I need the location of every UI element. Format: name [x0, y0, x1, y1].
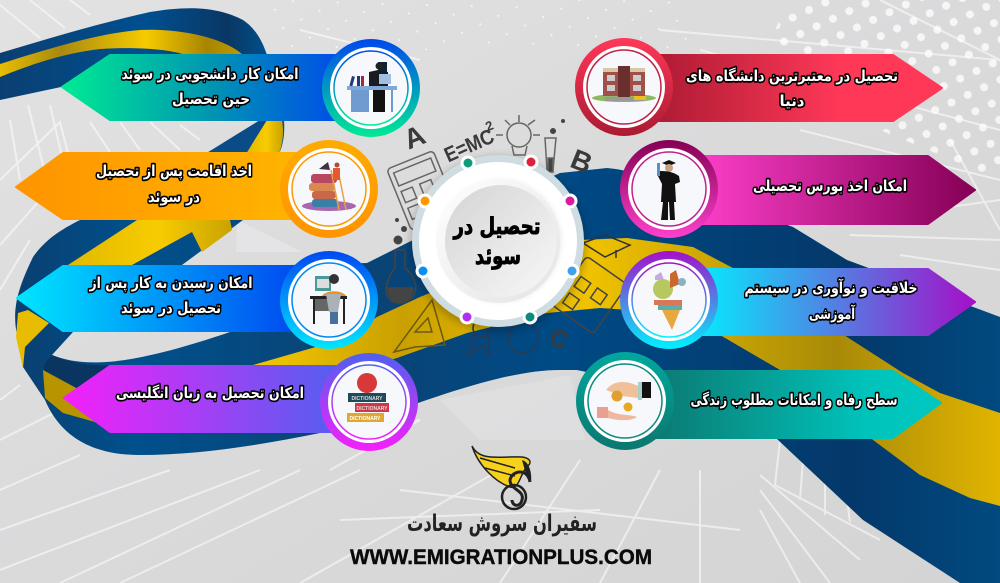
text: left 4: امکان تحصیل به زبان انگلیسی: [116, 384, 304, 402]
ribbon: top arc: [0, 8, 267, 100]
circle: left 3: [280, 251, 378, 349]
text: left 1: [122, 65, 298, 108]
circle: left 1: [322, 39, 420, 137]
doodle letters: [399, 118, 597, 355]
circle: right 1: [575, 38, 673, 136]
ribbon: gold under orange arrow: [68, 220, 232, 265]
circle: right 3: [620, 251, 718, 349]
icon: set square: [394, 300, 445, 352]
icon: apple: [508, 323, 538, 353]
icon: office worker: [347, 62, 397, 112]
hub dots: [417, 156, 578, 323]
circle: right 4: [576, 352, 674, 450]
text: left 3: تحصیل در سوئد: [121, 299, 221, 317]
website url: WWW.EMIGRATIONPLUS.COM: [350, 546, 652, 569]
ribbon: main gold band: [253, 238, 1000, 506]
icon: test tube: [545, 138, 556, 172]
icon: wing and swan: [472, 446, 531, 509]
icon: dictionaries and apple: DICTIONARY: [357, 406, 388, 412]
logo: [350, 446, 652, 569]
text: right 2: امکان اخذ بورس تحصیلی: [753, 177, 907, 195]
text: left 2: [96, 162, 252, 206]
icon: university building: [592, 66, 656, 102]
doodle letters: B: [566, 143, 597, 179]
arrow: right 3: [690, 269, 975, 335]
ribbon: gold lower loop: [43, 370, 95, 422]
text: left 2: در سوئد: [148, 188, 200, 206]
center hub: [410, 155, 586, 332]
arrow: right 4: [650, 371, 941, 438]
icon: calculator right: [552, 256, 628, 334]
text: right 3: خلاقیت و نوآوری در سیستم: [744, 279, 918, 297]
ribbon: loop shadow: [43, 355, 110, 392]
icon: books and ladder: [302, 162, 356, 211]
icon: calculator left: [387, 151, 458, 231]
doodle letters: 2: [483, 118, 495, 134]
hub title: تحصیل در: [453, 214, 540, 240]
icon: flask: [386, 250, 416, 303]
text: left 1: امکان کار دانشجویی در سوئد: [122, 65, 298, 83]
center doodles: [386, 115, 630, 355]
doodle letters: E=MC: [441, 125, 498, 167]
doodle letters: A: [399, 119, 430, 155]
icon: dictionaries and apple: DICTIONARY: [352, 396, 383, 402]
text: right 3: [744, 279, 918, 323]
icon: graduate: [657, 160, 680, 220]
icon: graduation cap: [583, 235, 630, 258]
text: right 1: [686, 67, 898, 110]
icon: dictionaries and apple: [347, 373, 389, 422]
hub title: [453, 214, 540, 270]
arrow: right 2: [690, 156, 975, 224]
text: right 1: دنیا: [780, 92, 805, 110]
arrow: left 4: [64, 366, 345, 432]
ribbon: top gold stripe: [0, 30, 243, 77]
ribbon: descending gold: [246, 120, 283, 154]
text: right 1: تحصیل در معتبرترین دانشگاه های: [686, 67, 898, 85]
doodle letters: C: [546, 323, 571, 355]
text: left 1: حین تحصیل: [172, 90, 250, 108]
arrow: right 1: [650, 55, 942, 121]
icon: hands and coins: [597, 382, 651, 420]
icon: light bulb: [496, 115, 540, 155]
icon: dots: [394, 119, 565, 244]
text: right 3: آموزشی: [809, 305, 856, 323]
circle: left 2: [280, 140, 378, 238]
arrow: left 2: [16, 153, 300, 219]
icon: creative pencil collage: [653, 270, 686, 330]
logo name: سفیران سروش سعادت: [407, 511, 597, 537]
ribbon: gold left loop: [16, 310, 49, 368]
text: left 2: اخذ اقامت پس از تحصیل: [96, 162, 252, 181]
hub title: سوئد: [475, 244, 521, 270]
text: right 4: سطح رفاه و امکانات مطلوب زندگی: [690, 391, 898, 409]
text: left 3: [89, 274, 252, 317]
text: left 3: امکان رسیدن به کار پس از: [89, 274, 252, 293]
circle: right 2: [620, 140, 718, 238]
ribbon: main navy band and loop: [15, 168, 1000, 583]
arrow: left 1: [62, 55, 350, 120]
icon: medal: [468, 319, 491, 355]
icon: dictionaries and apple: DICTIONARY: [350, 416, 381, 422]
ribbon: descending piece: [205, 120, 284, 154]
icon: person at computer: [310, 274, 347, 324]
arrow: left 3: [17, 266, 300, 331]
circle: left 4: [320, 353, 418, 451]
